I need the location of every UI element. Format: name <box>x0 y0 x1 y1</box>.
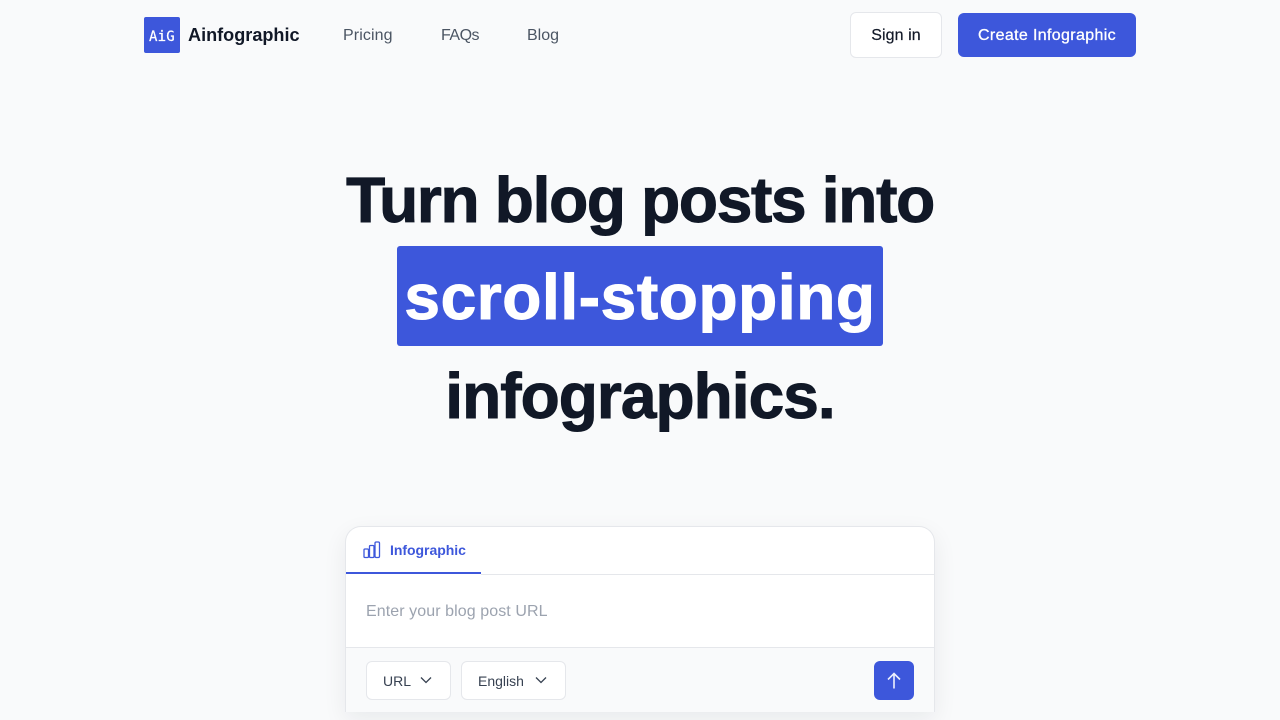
create infographic button <box>958 13 1136 57</box>
card footer <box>346 647 934 712</box>
highlight box with text: scroll-stopping <box>404 261 876 333</box>
headline <box>346 164 934 432</box>
icon: chevron <box>536 677 546 684</box>
sign in button: Sign in <box>871 27 921 44</box>
tab: infographic <box>346 527 481 574</box>
URL dropdown <box>366 661 451 700</box>
dropdown label: URL <box>383 673 411 689</box>
nav link: blog: Blog <box>527 27 559 44</box>
brand name: Ainfographic <box>188 25 300 45</box>
url input placeholder: Enter your blog post URL <box>366 603 548 620</box>
highlight box with text <box>397 246 883 346</box>
navigation bar <box>144 12 1136 58</box>
icon: bar chart <box>363 541 380 558</box>
create infographic button: Create Infographic <box>978 27 1116 44</box>
nav link: FAQs: FAQs <box>441 27 479 44</box>
nav link: pricing: Pricing <box>343 27 393 44</box>
language dropdown <box>461 661 566 700</box>
sign in button <box>850 12 942 58</box>
headline line 1: Turn blog posts into <box>346 164 934 236</box>
logo icon: AiG <box>149 29 175 45</box>
headline line 3: infographics. <box>445 360 835 432</box>
tab label: Infographic <box>390 542 466 558</box>
dropdown label: English <box>478 673 524 689</box>
input card <box>345 526 935 712</box>
tab divider <box>481 574 934 575</box>
logo icon <box>144 17 180 53</box>
icon: chevron <box>420 677 432 684</box>
submit button with arrow <box>874 661 914 700</box>
icon: up arrow <box>888 672 900 688</box>
